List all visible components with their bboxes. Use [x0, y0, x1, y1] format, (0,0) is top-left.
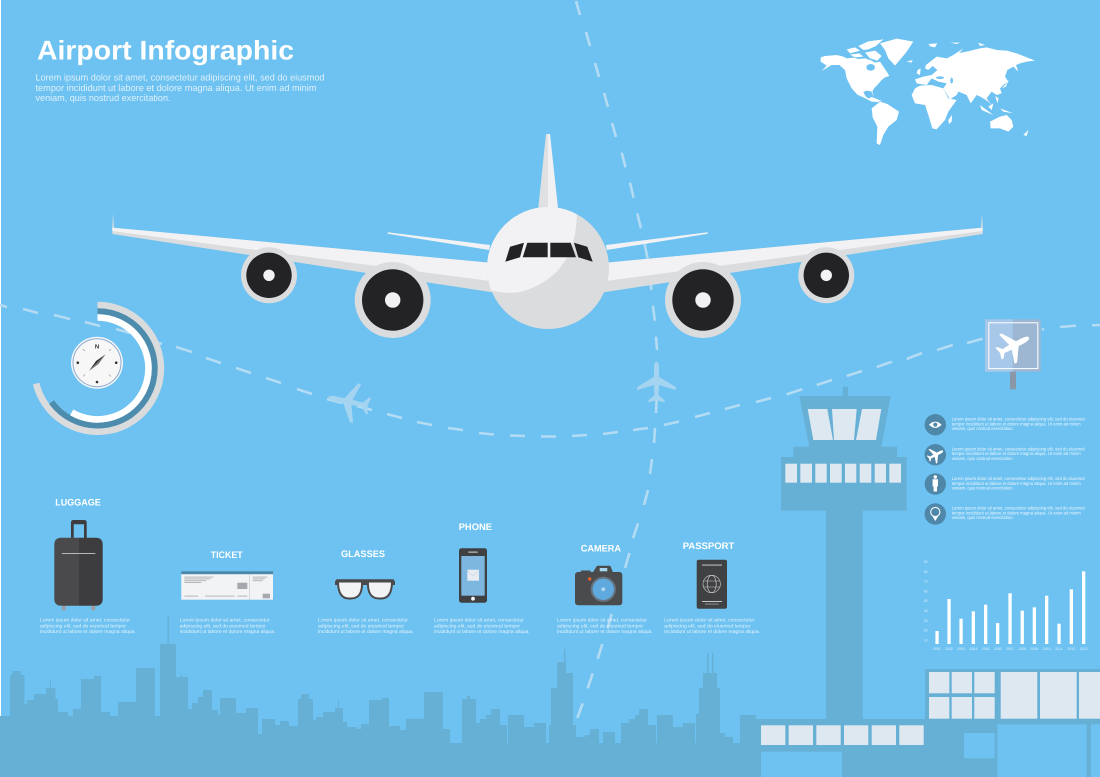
ticket text: incididunt ut labore et dolore magna aliqua. [180, 629, 275, 635]
icon: glasses [335, 579, 395, 598]
tail fin [538, 134, 558, 208]
city skyline [0, 616, 1100, 777]
intro paragraph: tempor incididunt ut labore et dolore magna aliqua. Ut enim ad minim [36, 82, 317, 93]
left wing [112, 213, 492, 292]
glasses heading: GLASSES [341, 549, 385, 560]
bar chart: 2010 [1043, 647, 1051, 651]
bar chart: 2004 [969, 647, 977, 651]
info row: location pin: veniam, quis nostrud exercitation. [952, 515, 1014, 520]
bar chart: 20 [924, 629, 928, 633]
bar chart: 40 [924, 609, 928, 613]
info row: person: veniam, quis nostrud exercitation. [952, 486, 1014, 491]
fuselage [487, 207, 609, 329]
passport text: adipiscing elit, sed do eiusmod tempor [664, 623, 751, 629]
icon: passport [697, 560, 727, 609]
intro paragraph [36, 72, 324, 103]
icon: ticket [181, 571, 273, 600]
camera text [557, 618, 653, 635]
phone heading: PHONE [459, 522, 492, 533]
bar chart: 2001 [933, 647, 941, 651]
info row: plane: tempor incididunt ut labore et dolore magna aliqua. Ut enim ad minim [952, 451, 1081, 456]
icon: faint plane on vertical route [637, 362, 676, 402]
phone text: Lorem ipsum dolor sit amet, consectetur [434, 618, 524, 624]
flight path: horizontal dashed route [0, 305, 1100, 436]
right wing [604, 213, 983, 292]
phone text: adipiscing elit, sed do eiusmod tempor [434, 623, 520, 629]
luggage text: adipiscing elit, sed do eiusmod tempor [40, 623, 126, 629]
bar chart: 60 [924, 589, 928, 593]
luggage heading: LUGGAGE [55, 498, 101, 509]
glasses text: incididunt ut labore et dolore magna aliqua. [318, 629, 414, 635]
intro paragraph: Lorem ipsum dolor sit amet, consectetur adipiscing elit, sed do eiusmod [36, 72, 324, 83]
info row: eye: Lorem ipsum dolor sit amet, consectetur adipiscing elit, sed do eiusmod [952, 417, 1085, 422]
bar chart: 90 [924, 560, 928, 564]
horizontal stabilizers [388, 232, 708, 250]
bar chart: 2006 [994, 647, 1002, 651]
info row: plane [924, 444, 1085, 466]
glasses text: adipiscing elit, sed do eiusmod tempor [318, 623, 404, 629]
icon: compass [71, 337, 123, 389]
luggage text [40, 618, 136, 635]
bar chart [924, 560, 1088, 651]
info row: person [925, 473, 1085, 495]
info row: plane: Lorem ipsum dolor sit amet, consectetur adipiscing elit, sed do eiusmod [952, 446, 1085, 451]
terminal building [761, 672, 1100, 777]
airport sign [985, 319, 1041, 389]
icon: luggage [54, 520, 103, 610]
camera heading: CAMERA [581, 544, 621, 555]
bar chart: 2007 [1006, 647, 1014, 651]
flight path: vertical dashed route [576, 1, 657, 718]
info row: location pin: Lorem ipsum dolor sit amet, consectetur adipiscing elit, sed do eiusmod [952, 506, 1085, 511]
bar chart: 80 [924, 570, 928, 574]
info row: location pin: tempor incididunt ut labore et dolore magna aliqua. Ut enim ad minim [952, 510, 1081, 515]
glasses text [318, 618, 414, 635]
passport text: Lorem ipsum dolor sit amet, consectetur [664, 618, 755, 624]
passport text: incididunt ut labore et dolore magna aliqua. [664, 629, 760, 635]
title: Airport Infographic [37, 36, 294, 66]
ticket text [180, 618, 275, 635]
bar chart: 2005 [982, 647, 990, 651]
passport heading: PASSPORT [683, 541, 734, 552]
bar chart: 70 [924, 580, 928, 584]
passport text [664, 618, 760, 635]
glasses text: Lorem ipsum dolor sit amet, consectetur [318, 618, 408, 624]
bar chart: 2003 [957, 647, 965, 651]
info row: eye: tempor incididunt ut labore et dolore magna aliqua. Ut enim ad minim [952, 421, 1081, 426]
ticket heading: TICKET [211, 550, 243, 561]
info row: eye [925, 414, 1085, 435]
left inner engine [355, 262, 431, 338]
bar chart: 2013 [1080, 647, 1088, 651]
ticket text: adipiscing elit, sed do eiusmod tempor [180, 623, 266, 629]
bar chart: 2008 [1018, 647, 1026, 651]
icon: camera [575, 566, 622, 605]
info row: eye: veniam, quis nostrud exercitation. [952, 426, 1014, 431]
info row: person: Lorem ipsum dolor sit amet, consectetur adipiscing elit, sed do eiusmod [952, 476, 1085, 481]
camera text: adipiscing elit, sed do eiusmod tempor [557, 623, 643, 629]
right inner engine [665, 262, 741, 338]
info row: plane: veniam, quis nostrud exercitation. [952, 456, 1014, 461]
world map [821, 39, 1035, 145]
info row: person: tempor incididunt ut labore et dolore magna aliqua. Ut enim ad minim [952, 481, 1081, 486]
bar chart: 50 [924, 599, 928, 603]
bar chart: 10 [924, 638, 928, 642]
airplane [112, 134, 983, 338]
phone text: incididunt ut labore et dolore magna aliqua. [434, 629, 530, 635]
bar chart: 2009 [1030, 647, 1038, 651]
intro paragraph: veniam, quis nostrud exercitation. [36, 92, 170, 103]
luggage text: incididunt ut labore et dolore magna aliqua. [40, 629, 136, 635]
icon: faint plane on horizontal route [324, 378, 374, 426]
camera text: incididunt ut labore et dolore magna aliqua. [557, 629, 653, 635]
bar chart: 2011 [1055, 647, 1063, 651]
phone text [434, 618, 530, 635]
bar chart: 2002 [945, 647, 953, 651]
compass progress rings [36, 305, 161, 432]
camera text: Lorem ipsum dolor sit amet, consectetur [557, 618, 647, 624]
icon: compass: N [95, 344, 99, 350]
bar chart: 2012 [1067, 647, 1075, 651]
cockpit windows [505, 243, 593, 262]
icon: phone [459, 548, 487, 603]
info row: location pin [925, 503, 1085, 525]
control tower [781, 387, 907, 721]
left outer engine [241, 247, 297, 303]
bar chart: 30 [924, 619, 928, 623]
right outer engine [798, 247, 854, 303]
luggage text: Lorem ipsum dolor sit amet, consectetur [40, 618, 130, 624]
ticket text: Lorem ipsum dolor sit amet, consectetur [180, 618, 270, 624]
